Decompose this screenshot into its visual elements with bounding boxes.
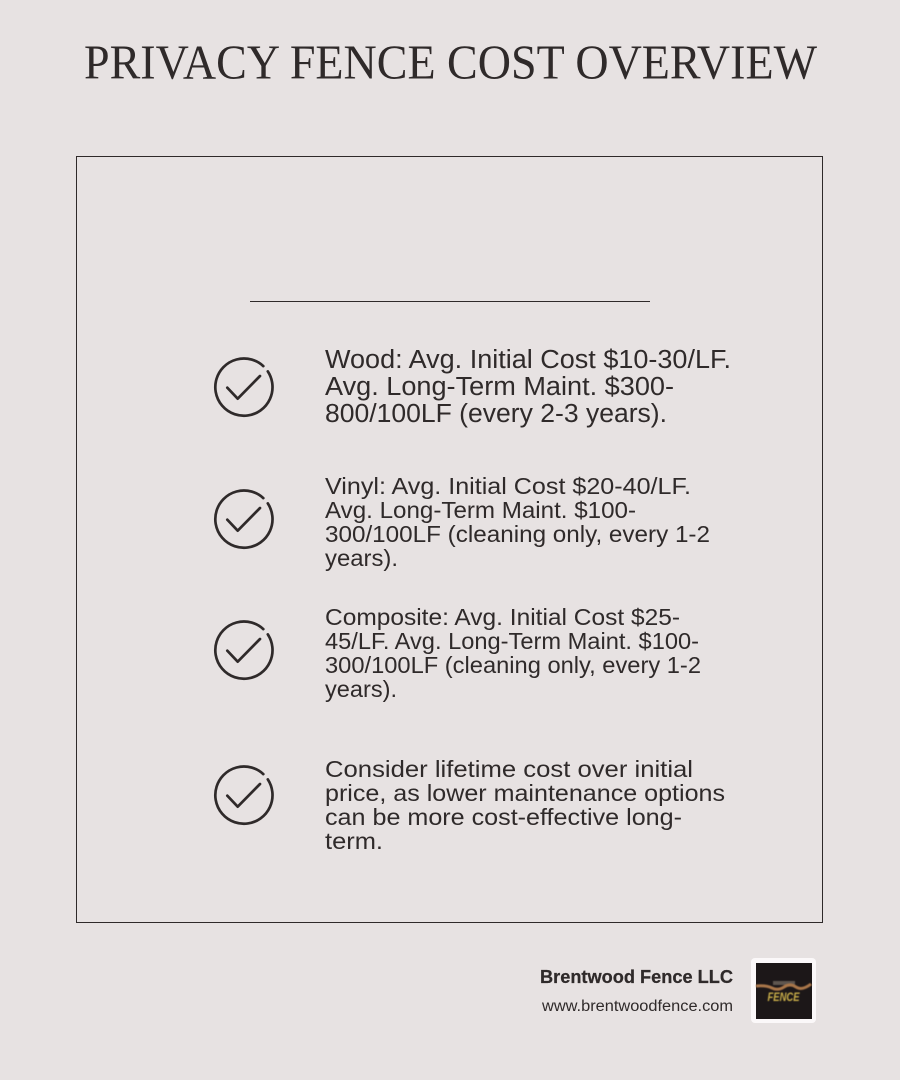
text: wood bbox=[325, 346, 731, 428]
text: composite: 300/100LF (cleaning only, every 1-2 bbox=[325, 652, 701, 678]
title: PRIVACY FENCE COST OVERVIEW bbox=[84, 34, 818, 90]
logo: FENCE bbox=[768, 990, 800, 1004]
panel: cost overview frame bbox=[76, 156, 822, 922]
text: composite: Composite: Avg. Initial Cost $25- bbox=[325, 604, 680, 630]
footer website: www.brentwoodfence.com bbox=[541, 998, 733, 1015]
icon: check lifetime cost bbox=[215, 767, 273, 824]
text: wood: Avg. Long-Term Maint. $300- bbox=[325, 373, 674, 401]
text: wood: Wood: Avg. Initial Cost $10-30/LF. bbox=[325, 346, 731, 374]
text: lifetime cost: Consider lifetime cost over initial bbox=[325, 756, 693, 782]
text: wood: 800/100LF (every 2-3 years). bbox=[325, 400, 667, 428]
text: vinyl: Avg. Long-Term Maint. $100- bbox=[325, 497, 636, 523]
text: vinyl: 300/100LF (cleaning only, every 1-2 bbox=[325, 521, 710, 547]
text: lifetime cost: can be more cost-effective long- bbox=[325, 804, 682, 830]
text: vinyl: Vinyl: Avg. Initial Cost $20-40/LF. bbox=[325, 473, 691, 499]
text: lifetime cost: term. bbox=[325, 828, 383, 854]
icon: check wood bbox=[215, 359, 273, 416]
text: lifetime cost bbox=[325, 756, 725, 854]
text: vinyl: years). bbox=[325, 545, 398, 571]
text: vinyl bbox=[325, 473, 710, 571]
icon: check composite bbox=[215, 622, 273, 679]
text: composite bbox=[325, 604, 701, 702]
logo bbox=[751, 958, 816, 1023]
text: composite: 45/LF. Avg. Long-Term Maint. $100- bbox=[325, 628, 699, 654]
text: lifetime cost: price, as lower maintenance options bbox=[325, 780, 725, 806]
footer company name: Brentwood Fence LLC bbox=[540, 967, 733, 987]
icon: check vinyl bbox=[215, 491, 273, 548]
text: composite: years). bbox=[325, 676, 397, 702]
